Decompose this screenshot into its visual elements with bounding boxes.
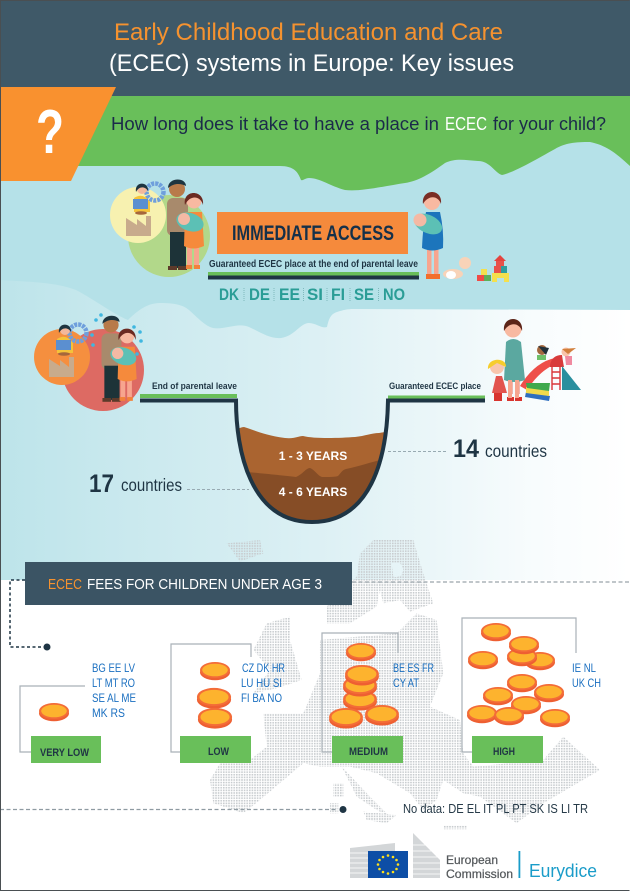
illustration: family with worker, immediate access	[110, 179, 210, 277]
stat: 14 countries	[388, 435, 547, 463]
immediate access countries: FI	[331, 285, 345, 304]
fees heading bar: ECEC	[48, 577, 82, 593]
immediate access countries: NO	[383, 285, 405, 304]
logo: Eurydice	[518, 851, 597, 881]
fee level: low	[171, 644, 285, 763]
icon: sweat drops	[90, 313, 143, 356]
fee level: low: LU HU SI	[241, 676, 282, 690]
fee level: low: LOW	[208, 746, 229, 758]
text: 1-3 years: 1 - 3 YEARS	[279, 449, 347, 463]
fee level: high: IE NL	[572, 661, 596, 675]
green and dark rule	[208, 272, 419, 280]
dotted map of Europe	[210, 540, 600, 829]
title banner	[0, 0, 630, 96]
fee level: very low: BG EE LV	[92, 661, 135, 675]
fee level: very low: SE AL ME	[92, 691, 136, 705]
logo: wordmark: European	[446, 853, 498, 867]
fee level: medium	[322, 633, 434, 763]
dashed connector: top	[10, 580, 50, 650]
label: end of parental leave: End of parental leave	[152, 381, 237, 392]
icon: crawling baby	[443, 257, 471, 279]
fees heading bar	[25, 562, 352, 605]
fee level: medium: BE ES FR	[393, 661, 434, 675]
logo: building	[350, 833, 440, 878]
chart: waiting-time pit	[140, 396, 485, 525]
dashed connector: bottom	[0, 806, 346, 813]
fee level: high: UK CH	[572, 676, 601, 690]
immediate access box: IMMEDIATE ACCESS	[232, 222, 394, 245]
logo: Eurydice: Eurydice	[529, 861, 597, 881]
logo: wordmark	[446, 853, 513, 881]
icon: mother and baby	[411, 192, 445, 279]
guaranteed place subtitle: Guaranteed ECEC place at the end of parental leave	[209, 258, 418, 270]
fee level: low: CZ DK HR	[242, 661, 285, 675]
fee level: very low	[20, 661, 136, 763]
question mark: ?	[36, 98, 64, 167]
stat: 17 countries: 17	[89, 470, 114, 498]
immediate access countries: SI	[307, 285, 323, 304]
text: 4-6 years: 4 - 6 YEARS	[279, 485, 347, 499]
fee level: very low: VERY LOW	[40, 747, 90, 759]
no data note: No data: DE EL IT PL PT SK IS LI TR	[403, 802, 588, 816]
immediate access countries: SE	[354, 285, 374, 304]
immediate access countries: EE	[279, 285, 300, 304]
logo: European Commission	[350, 833, 513, 881]
fees heading bar: FEES FOR CHILDREN UNDER AGE 3	[87, 577, 322, 593]
title: line 1: Early Childhood Education and Care	[114, 19, 503, 46]
green question band	[0, 96, 630, 190]
question heading: How long does it take to have a place in	[111, 113, 439, 134]
stat: 14 countries: countries	[485, 441, 547, 461]
fee level: medium: CY AT	[393, 676, 420, 690]
immediate access countries: DE	[249, 285, 270, 304]
logo: EU flag	[368, 851, 408, 878]
fee level: very low: MK RS	[92, 706, 125, 720]
fee level: medium: MEDIUM	[349, 746, 388, 758]
question heading	[111, 113, 606, 134]
label: guaranteed ECEC place: Guaranteed ECEC place	[389, 381, 481, 392]
illustration: teacher, child and slide	[488, 319, 581, 401]
fee level: very low: LT MT RO	[92, 676, 135, 690]
title: line 2: (ECEC) systems in Europe: Key issues	[109, 50, 514, 77]
fee level: high: HIGH	[493, 746, 515, 758]
question heading: ECEC	[445, 113, 487, 134]
illustration: worried family	[34, 313, 144, 411]
stat: 14 countries: 14	[453, 435, 479, 463]
logo: wordmark: Commission	[446, 867, 513, 881]
stat: 17 countries: countries	[121, 475, 182, 495]
fee level: low: FI BA NO	[241, 691, 282, 705]
fee level: high	[462, 618, 601, 763]
icon: toy blocks	[477, 255, 509, 282]
stat: 17 countries	[89, 470, 249, 498]
question heading: for your child?	[493, 113, 606, 134]
immediate access countries: DK	[219, 285, 240, 304]
immediate access countries	[219, 285, 405, 304]
orange question tab	[0, 87, 116, 181]
immediate access box	[217, 212, 408, 254]
